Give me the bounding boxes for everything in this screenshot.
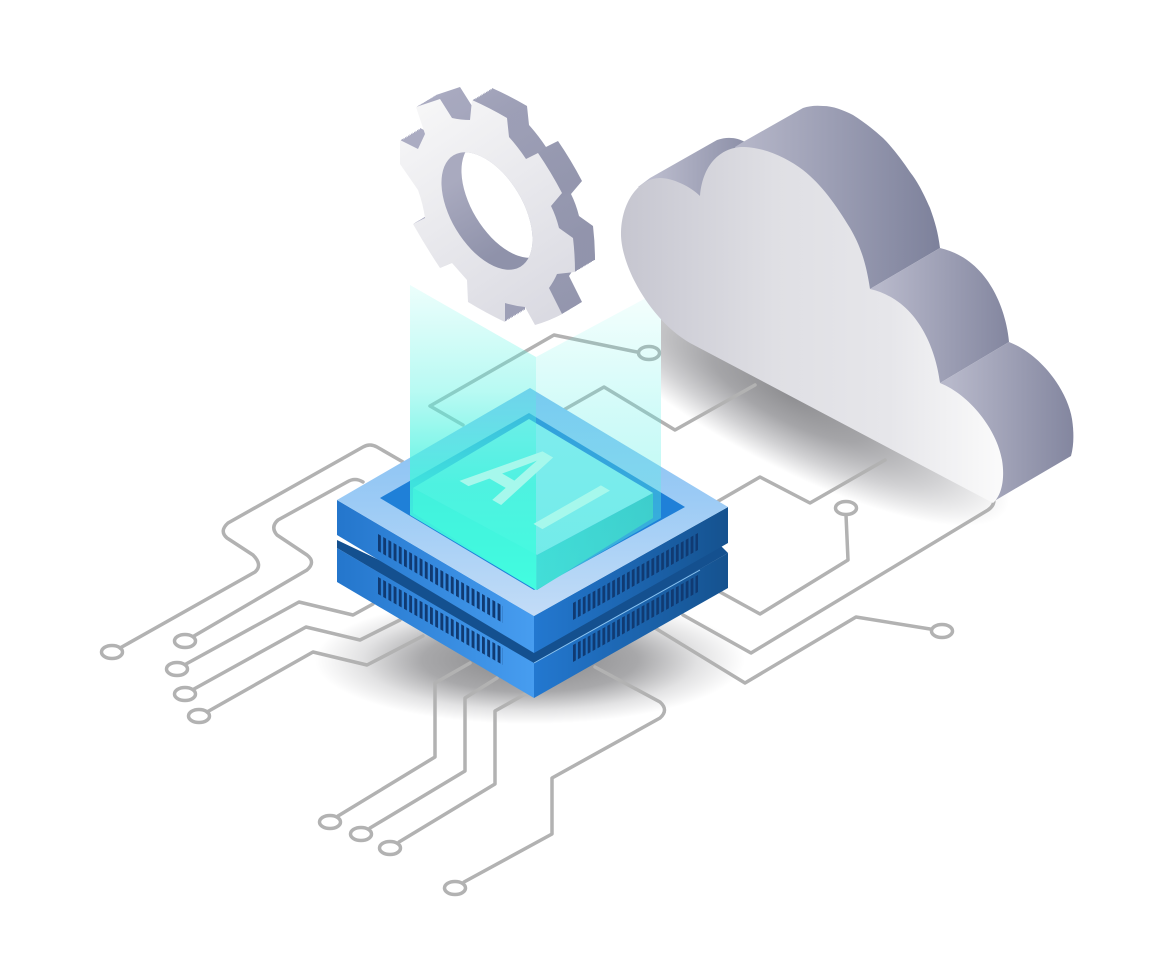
trace: left 3 <box>166 602 373 676</box>
AI label: AI <box>436 430 661 559</box>
trace: bottom 4 <box>444 667 664 894</box>
trace: left 4 <box>174 620 400 700</box>
trace: left 1 <box>102 445 403 658</box>
trace: left 2 <box>174 480 363 648</box>
trace: bottom 1 <box>320 663 470 828</box>
cloud side: middle lobe <box>870 248 1009 383</box>
gear hole <box>442 152 532 270</box>
raised block <box>413 419 653 590</box>
cloud side: large lobe <box>735 106 940 289</box>
cloud side: lower lobe <box>940 342 1073 500</box>
isometric illustration <box>100 87 1074 896</box>
upper plate <box>337 388 728 653</box>
trace: left 5 <box>188 636 423 722</box>
lower plate <box>337 540 728 698</box>
trace: right 2 <box>683 500 994 653</box>
shadow under cloud <box>661 320 996 519</box>
trace: upper 3 <box>430 335 660 425</box>
cloud side: left lobe <box>638 138 745 196</box>
circuit traces <box>102 335 994 894</box>
cloud <box>621 106 1073 503</box>
AI chip <box>337 388 728 698</box>
gear extrusion <box>401 87 595 324</box>
trace: upper 2 <box>560 385 755 430</box>
trace: right 1 <box>720 502 856 614</box>
trace: upper 1 <box>715 460 885 503</box>
trace: bottom 2 <box>350 678 497 840</box>
gear <box>400 87 595 325</box>
gear face <box>400 99 575 325</box>
cloud face <box>621 147 1003 503</box>
hologram light panels <box>410 285 661 590</box>
trace: bottom 3 <box>380 693 527 854</box>
shadow under chip <box>315 596 745 724</box>
trace: right 3 <box>655 617 952 683</box>
